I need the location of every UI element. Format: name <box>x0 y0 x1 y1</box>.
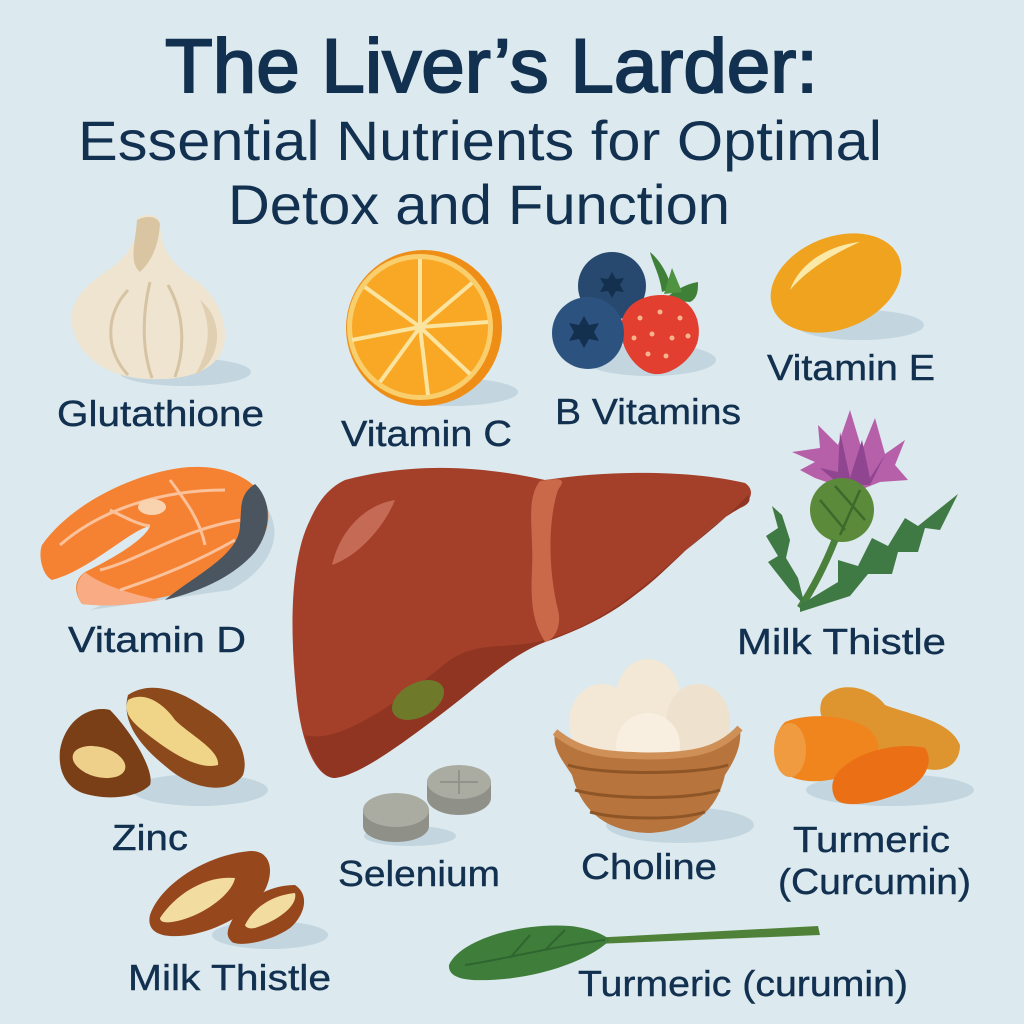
label: Choline: Choline <box>581 846 717 887</box>
subtitle: Essential Nutrients for Optimal <box>78 109 882 172</box>
icon: spoon with green leaf <box>449 925 820 980</box>
subtitle <box>78 109 882 236</box>
title: The Liver’s Larder: <box>165 24 818 109</box>
subtitle: Detox and Function <box>228 173 730 236</box>
label: Selenium: Selenium <box>338 853 500 894</box>
icon: vitamin E capsule <box>756 215 924 351</box>
label: Zinc: Zinc <box>112 817 188 858</box>
label: B Vitamins: B Vitamins <box>555 391 741 432</box>
icon: brazil nuts <box>149 851 328 949</box>
label: Milk Thistle (bottom): Milk Thistle <box>128 957 331 998</box>
label: Turmeric (Curcumin): Turmeric <box>793 819 950 860</box>
icon: turmeric roots <box>774 687 974 806</box>
icon: garlic <box>72 215 251 386</box>
label: Turmeric (curumin): Turmeric (curumin) <box>578 963 908 1004</box>
icon: milk thistle plant <box>766 410 958 612</box>
label: Glutathione: Glutathione <box>57 393 264 434</box>
icon: basket of eggs <box>554 659 754 843</box>
icon: liver <box>293 468 751 778</box>
icon: selenium tablets <box>363 765 491 846</box>
label: Vitamin C: Vitamin C <box>341 413 512 454</box>
label: Vitamin D: Vitamin D <box>68 619 246 660</box>
icon: salmon steak <box>40 467 274 610</box>
label: Vitamin E: Vitamin E <box>767 347 935 388</box>
label: Turmeric (Curcumin) <box>778 819 971 902</box>
icon: nuts <box>60 688 268 806</box>
icon: orange slice <box>346 250 518 406</box>
icon: berries <box>552 252 716 376</box>
label: Turmeric (Curcumin): (Curcumin) <box>778 861 971 902</box>
label: Milk Thistle (right): Milk Thistle <box>737 621 946 662</box>
